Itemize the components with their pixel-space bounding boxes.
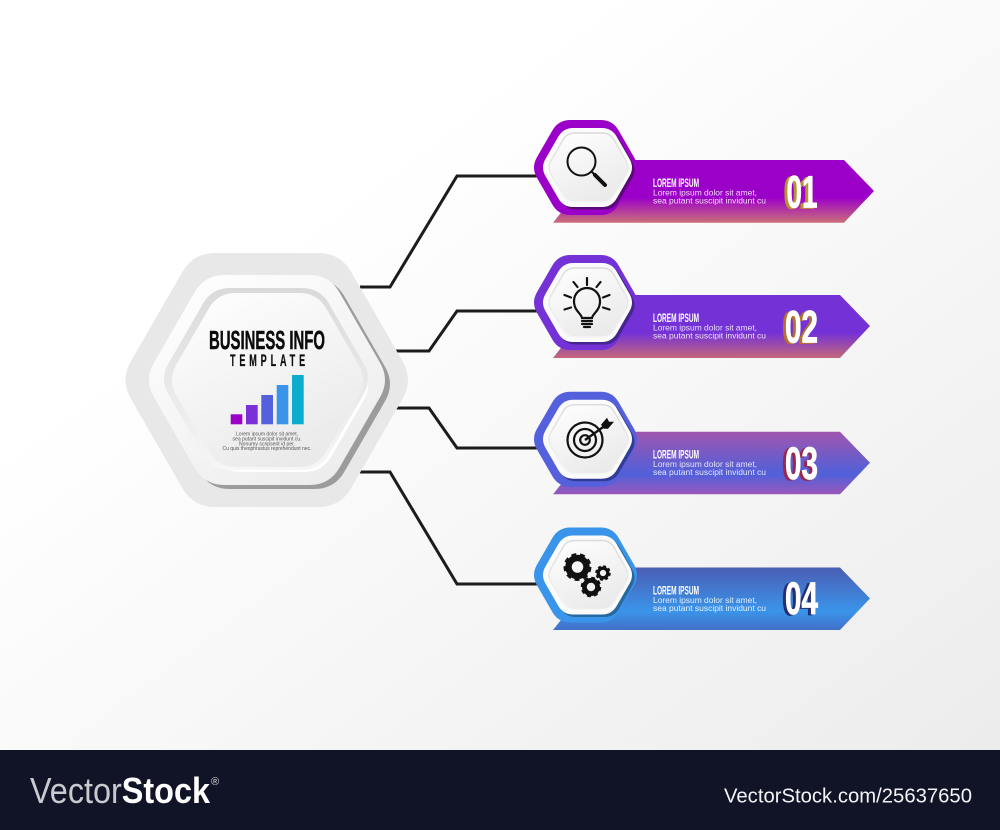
badge hexagon 01 xyxy=(534,120,637,215)
description text xyxy=(222,432,312,452)
text 02 xyxy=(653,324,766,340)
badge white 03 xyxy=(543,400,632,479)
badge white 02 xyxy=(543,263,632,342)
description text: Lorem ipsum dolor sit amet, xyxy=(236,432,298,438)
item 01 xyxy=(534,120,874,223)
badge face 04 xyxy=(549,540,628,610)
badge white 04 xyxy=(543,536,632,614)
number 01: 01 xyxy=(786,166,818,218)
badge shadow 02 xyxy=(546,266,634,344)
text 01: Lorem ipsum dolor sit amet, xyxy=(653,188,757,198)
description text: Cu quis theophrastus reprehendunt nec. xyxy=(222,446,312,452)
connector lines xyxy=(360,176,542,584)
text 04: sea putant suscipit invidunt cu xyxy=(653,604,766,613)
inner face xyxy=(172,293,363,467)
text 03: sea putant suscipit invidunt cu xyxy=(653,468,766,477)
heading 02: LOREM IPSUM xyxy=(653,313,699,325)
number 01: 01 xyxy=(784,168,814,218)
subtitle: TEMPLATE xyxy=(230,351,309,370)
inner white ring xyxy=(177,298,368,472)
number 02: 02 xyxy=(782,302,815,354)
icon: light bulb xyxy=(564,278,610,327)
text 02: Lorem ipsum dolor sit amet, xyxy=(653,324,757,332)
central hexagon panel xyxy=(126,253,408,507)
text 04 xyxy=(653,596,766,613)
text 03 xyxy=(653,460,766,477)
footer logo: VectorStock xyxy=(30,770,211,811)
banner 04 xyxy=(553,568,870,630)
item 03 xyxy=(534,392,870,494)
white plate xyxy=(149,275,385,485)
icon: target xyxy=(568,418,614,458)
description text: sea putant suscipit invidunt cu. xyxy=(232,437,302,443)
footer url: VectorStock.com/25637650 xyxy=(724,786,972,808)
description text: Nonumy scripserit id per. xyxy=(239,441,295,447)
banner 02 xyxy=(553,295,870,358)
heading 04: LOREM IPSUM xyxy=(653,586,699,598)
heading 01: LOREM IPSUM xyxy=(653,178,699,190)
inner rim xyxy=(164,288,368,470)
number 02: 02 xyxy=(785,302,818,352)
main title: BUSINESS INFO xyxy=(209,325,325,355)
number 03: 03 xyxy=(782,439,815,490)
heading 03: LOREM IPSUM xyxy=(653,450,699,462)
number 03: 03 xyxy=(785,438,818,489)
plate shadow xyxy=(154,279,390,489)
badge shadow 01 xyxy=(546,130,634,210)
item 02 xyxy=(534,255,870,358)
bar chart xyxy=(231,375,304,424)
item 04 xyxy=(534,528,870,630)
number 04: 04 xyxy=(785,573,818,624)
icon: magnifier xyxy=(568,148,605,185)
badge hexagon 03 xyxy=(534,392,637,487)
outer grey hexagon xyxy=(126,253,408,507)
text 03: Lorem ipsum dolor sit amet, xyxy=(653,460,757,469)
badge face 01 xyxy=(549,133,628,202)
banner 03 xyxy=(553,432,870,494)
text 01: sea putant suscipit invidunt cu xyxy=(653,196,766,206)
registered mark: ® xyxy=(211,776,219,788)
badge white 01 xyxy=(543,128,632,207)
badge face 02 xyxy=(549,268,628,337)
number 04: 04 xyxy=(782,574,815,625)
badge hexagon 02 xyxy=(534,255,637,350)
text 01 xyxy=(653,188,766,206)
text 02: sea putant suscipit invidunt cu xyxy=(653,332,766,340)
badge face 03 xyxy=(549,405,628,474)
icon: gears xyxy=(565,555,610,596)
banner 01 xyxy=(553,160,874,223)
footer bar xyxy=(0,750,1000,830)
number 01 xyxy=(784,166,818,218)
badge shadow 03 xyxy=(546,402,634,481)
badge hexagon 04 xyxy=(534,528,637,622)
text 04: Lorem ipsum dolor sit amet, xyxy=(653,596,757,605)
badge shadow 04 xyxy=(546,538,634,617)
